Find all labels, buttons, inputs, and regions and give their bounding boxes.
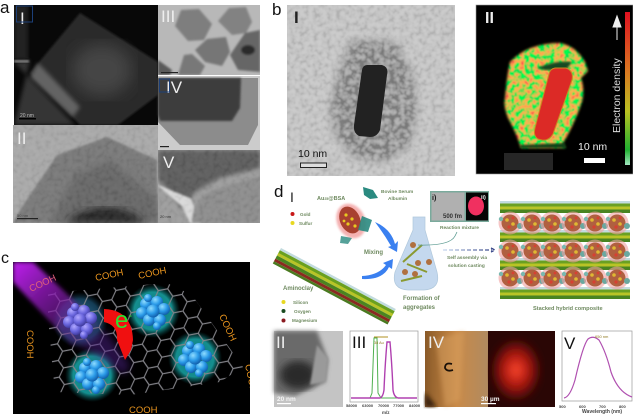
- density shell: [504, 43, 588, 148]
- COOH labels: [24, 265, 259, 416]
- panel c: graphene schematic: [13, 262, 259, 416]
- panel b-II: electron density map: [476, 5, 633, 174]
- scale bar 10 nm: [578, 141, 607, 163]
- axis ticks: 63000: [362, 403, 374, 408]
- label II: II: [17, 129, 26, 148]
- formation label: Formation of: [403, 296, 441, 302]
- inset reaction mixture: i): [432, 195, 436, 202]
- legend: gold, sulfur: Gold: [300, 212, 311, 217]
- panel d-II: TEM image: [274, 331, 343, 407]
- aminoclay label and legend: Aminoclay: [283, 286, 314, 292]
- self assembly label: solution casting: [448, 263, 485, 269]
- blue arrow from aminoclay: [362, 259, 393, 279]
- panel label b: b: [272, 0, 281, 19]
- panel d-I: self assembly schematic: [273, 187, 630, 324]
- panel d-I: self assembly schematic: Silicon: [293, 300, 308, 305]
- electron label: e: [115, 307, 128, 334]
- panel d-III: mass spectrum: m/z: [382, 410, 390, 415]
- coated particle shell: [330, 40, 417, 162]
- scale bar: [161, 72, 178, 73]
- label IV: IV: [166, 78, 183, 97]
- label I: I: [290, 189, 294, 205]
- panel d-V: emission spectrum: [559, 331, 632, 415]
- red electron transfer arrow: [104, 309, 133, 360]
- axis ticks: 500: [559, 404, 566, 409]
- scale bar: 20 nm: [20, 113, 34, 119]
- blue arrow from nanoparticle: [375, 222, 398, 252]
- BSA protein and label: Albumin: [388, 196, 407, 202]
- BSA protein and label: [363, 187, 413, 202]
- label II: II: [276, 333, 285, 352]
- label II: II: [485, 10, 494, 27]
- label IV: IV: [428, 333, 445, 352]
- scale bar: 20 nm: [277, 396, 296, 403]
- connector to inset: [418, 232, 457, 245]
- hexagonal lattice: [48, 283, 243, 395]
- panel d-I: self assembly schematic: Magnesium: [292, 318, 317, 323]
- label I: I: [20, 9, 25, 28]
- axis ticks: [559, 404, 626, 409]
- scale bar: [160, 146, 169, 147]
- colour scale bar: [625, 12, 630, 165]
- panel d-V: emission spectrum: Wavelength (nm): [582, 409, 622, 415]
- COOH labels: COOH: [137, 265, 168, 282]
- panel label d: d: [274, 182, 283, 201]
- COOH labels: COOH: [242, 363, 259, 394]
- axis ticks: [346, 403, 421, 408]
- dark gold nanorod: [354, 65, 387, 137]
- formation label: aggregates: [403, 305, 436, 311]
- inset reaction mixture: 500 fm: [443, 214, 462, 220]
- panel label c: c: [1, 250, 9, 267]
- legend: gold, sulfur: Sulfur: [299, 221, 312, 226]
- label V: V: [163, 153, 175, 172]
- COOH labels: COOH: [129, 405, 158, 416]
- self assembly label: [447, 255, 487, 269]
- Au25@BSA label: Au25@BSA: [317, 196, 345, 202]
- electron density axis: [611, 16, 623, 133]
- aminoclay sheet: [273, 248, 396, 324]
- COOH labels: COOH: [216, 313, 238, 343]
- red nanorod: [534, 68, 572, 140]
- Mixing label: Mixing: [364, 250, 383, 256]
- panel d-IV: optical micrographs: [425, 331, 555, 407]
- quantum clusters: [63, 294, 212, 394]
- panel d-I: self assembly schematic: Oxygen: [294, 309, 311, 314]
- axis ticks: 800: [619, 404, 626, 409]
- axis ticks: 70000: [378, 403, 390, 408]
- axis ticks: 600: [579, 404, 586, 409]
- image a-IV: TEM crystal edge: [158, 76, 260, 150]
- label I: I: [294, 8, 299, 27]
- legend: gold, sulfur: [290, 212, 312, 226]
- panel d-III: mass spectrum: [346, 331, 421, 415]
- cluster halos: [52, 284, 222, 402]
- composite label: Stacked hybrid composite: [533, 306, 603, 312]
- scale bar 10 nm: 10 nm: [298, 148, 327, 160]
- flask: [394, 217, 438, 290]
- axis ticks: 58000: [346, 403, 358, 408]
- axis ticks: 77000: [393, 403, 405, 408]
- image a-II: TEM hexagon: [13, 125, 158, 223]
- COOH labels: COOH: [28, 273, 58, 295]
- inset reaction mixture: [430, 191, 489, 231]
- nanoparticle: [331, 199, 372, 244]
- electron density axis: Electron density: [611, 58, 623, 133]
- panel d-III: mass spectrum: 38 Au: [374, 341, 384, 345]
- stacked hybrid composite: [498, 201, 630, 299]
- scale bar: [17, 213, 38, 219]
- label III: III: [161, 7, 175, 26]
- image a-III: hexagonal crystals: [158, 5, 260, 75]
- inset reaction mixture: ii): [481, 195, 486, 201]
- axis ticks: 700: [599, 404, 606, 409]
- COOH labels: COOH: [24, 330, 35, 359]
- purple light beam: [13, 262, 100, 345]
- redacted dark box: [504, 153, 553, 170]
- COOH labels: COOH: [94, 267, 125, 284]
- image a-I: dark field cube: [14, 5, 158, 125]
- axis ticks: 84000: [409, 403, 421, 408]
- scale bar 10 nm: 10 nm: [578, 141, 607, 153]
- formation label: [403, 296, 441, 311]
- self assembly label: Self assembly via: [447, 255, 487, 261]
- image a-V: TEM junction: [158, 150, 260, 223]
- label V: V: [564, 334, 576, 353]
- scale bar: 50 nm: [17, 213, 29, 218]
- panel d-V: emission spectrum: 650 nm: [595, 334, 609, 339]
- scale bar 10 nm: [298, 148, 327, 168]
- BSA protein and label: Bovine Serum: [381, 189, 413, 195]
- panel a: microscopy images: [13, 5, 260, 223]
- label III: III: [352, 333, 366, 352]
- panel b-I: TEM nanorod: [287, 5, 455, 176]
- scale bar: 20 nm: [160, 214, 172, 219]
- dashed arrow: [443, 248, 495, 252]
- scale bar: 30 µm: [481, 396, 500, 403]
- electron label: -: [128, 310, 132, 322]
- inset reaction mixture: Reaction mixture: [440, 225, 479, 231]
